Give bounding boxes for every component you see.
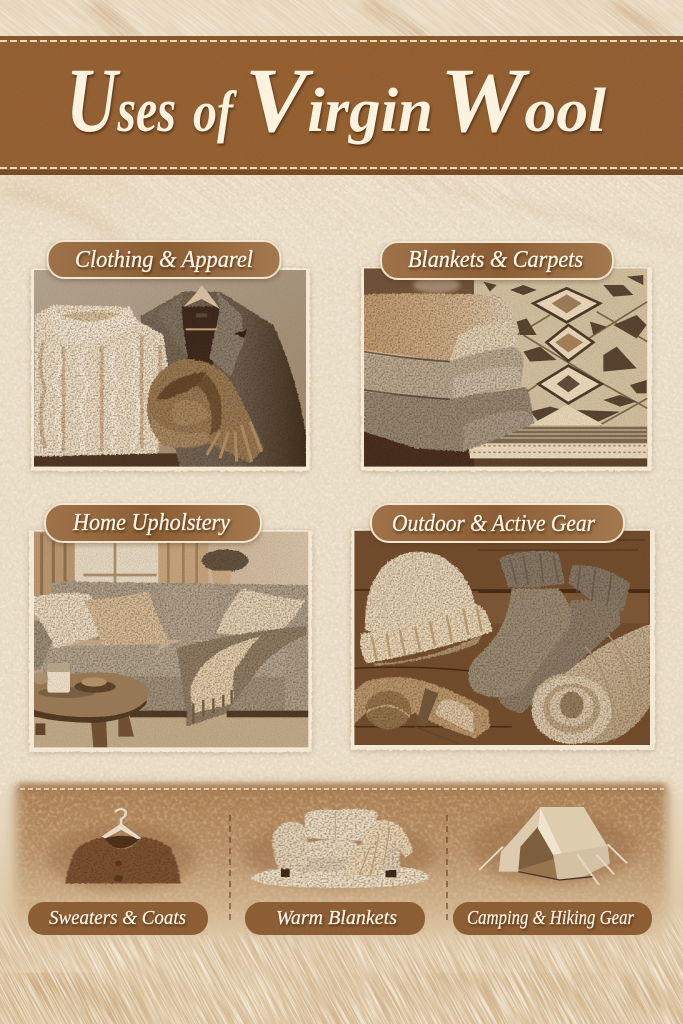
- label pill: sweaters and coats: [28, 902, 208, 935]
- panel: home upholstery: [29, 504, 312, 752]
- heading pill: outdoor and active gear: Outdoor & Active Gear: [392, 511, 596, 537]
- photo: sweater, coat and scarf: [34, 270, 306, 467]
- panel: outdoor and active gear: [351, 504, 655, 750]
- title: Virgin: [245, 49, 433, 151]
- heading pill: home upholstery: [45, 504, 261, 542]
- icon: cardigan on hanger: [48, 809, 196, 892]
- label pill: camping and hiking gear: [453, 902, 652, 935]
- title: Wool: [440, 49, 607, 151]
- header banner: leather strip: [0, 36, 683, 175]
- heading pill: home upholstery: Home Upholstery: [72, 510, 230, 536]
- photo: beanie, socks, mittens and rolled blanket: [354, 531, 650, 745]
- item: warm blankets: [244, 809, 436, 935]
- photo: living room sofa: [33, 532, 308, 747]
- heading pill: outdoor and active gear: [371, 504, 624, 542]
- panel: clothing and apparel: [31, 241, 310, 471]
- item: camping and hiking gear: [453, 807, 652, 935]
- item: sweaters and coats: [28, 809, 208, 935]
- bottom panel: leather summary strip: [16, 784, 667, 936]
- label pill: camping and hiking gear: Camping & Hiking Gear: [467, 907, 634, 929]
- title: Uses: [66, 49, 176, 151]
- label pill: sweaters and coats: Sweaters & Coats: [49, 907, 186, 929]
- icon: canvas tent: [470, 807, 636, 885]
- title: of: [193, 79, 238, 144]
- icon: armchair on rug with throw: [244, 809, 436, 888]
- label pill: warm blankets: [245, 902, 425, 935]
- label pill: warm blankets: Warm Blankets: [276, 907, 397, 929]
- heading pill: clothing and apparel: Clothing & Apparel: [75, 247, 253, 273]
- heading pill: clothing and apparel: [48, 241, 280, 278]
- photo: folded blankets and patterned rug: [364, 268, 647, 467]
- heading pill: blankets and carpets: [381, 242, 613, 279]
- heading pill: blankets and carpets: Blankets & Carpets: [408, 247, 583, 273]
- panel: blankets and carpets: [361, 242, 652, 471]
- title: [66, 49, 607, 151]
